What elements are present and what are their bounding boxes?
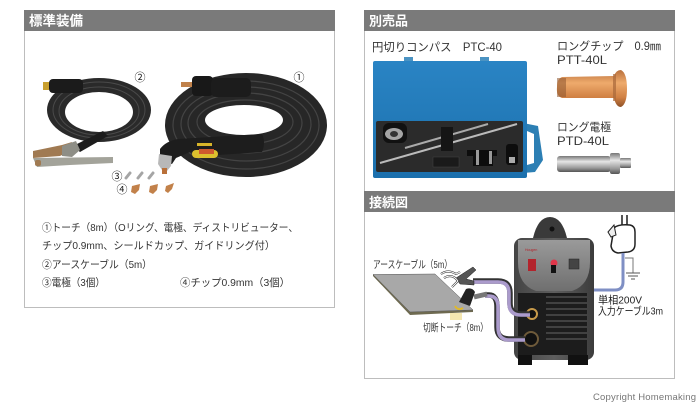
icon: plasma cutter machine: Hougen — [525, 248, 537, 252]
label: long electrode: PTD-40L — [557, 136, 610, 148]
icon: metal plate — [373, 274, 473, 315]
text: equipment list: ②アースケーブル（5m） — [42, 258, 152, 271]
text: equipment list — [42, 221, 298, 289]
icon: torch cable path — [485, 295, 525, 339]
label: input cable text — [598, 294, 663, 318]
panel: connection diagram — [364, 191, 675, 378]
label: input cable text: 入力ケーブル3m — [598, 304, 663, 318]
heading: connection diagram — [364, 191, 675, 212]
label: long tip — [557, 39, 661, 67]
heading: optional parts — [364, 10, 675, 31]
label: number 1: ① — [294, 71, 304, 84]
icon: electrodes — [112, 170, 153, 183]
label: long electrode — [557, 120, 611, 148]
icon: electrodes: ③ — [112, 170, 122, 183]
text: equipment list: ①トーチ（8m）（Oリング、電極、ディストリビューター、 — [42, 221, 298, 234]
panel: optional parts — [364, 10, 675, 192]
label: earth cable: アースケーブル（5m） — [373, 258, 452, 271]
text: equipment list: ③電極（3個） — [42, 276, 105, 289]
label: input cable text: 単相200V — [598, 294, 642, 306]
label: long electrode: ロング電極 — [557, 120, 611, 134]
heading: standard equipment — [24, 10, 335, 31]
icon: earth cable path — [473, 281, 530, 314]
text: equipment list: ④チップ0.9mm（3個） — [180, 276, 290, 289]
panel: standard equipment — [24, 10, 335, 308]
icon: power plug and ground — [608, 215, 640, 279]
label: long tip: PTT-40L — [557, 55, 608, 67]
label: circle compass: 円切りコンパス PTC-40 — [372, 41, 502, 54]
icon: plasma torch — [158, 134, 264, 174]
icon: tips — [116, 183, 174, 196]
icon: long tip — [557, 70, 627, 107]
icon: torch cable coil — [165, 73, 327, 177]
text: equipment list: チップ0.9mm、シールドカップ、ガイドリング付） — [42, 239, 275, 252]
icon: tips: ④ — [116, 183, 128, 196]
icon: torch cable inner — [485, 296, 525, 340]
icon: input cable — [594, 253, 623, 290]
icon: earth clamp — [33, 131, 113, 167]
icon: compass case — [373, 57, 543, 178]
icon: plasma cutter machine — [514, 217, 594, 365]
copyright: Copyright Homemaking — [593, 392, 696, 403]
icon: earth clamp in diagram — [441, 267, 476, 287]
heading: connection diagram: 接続図 — [369, 195, 408, 210]
heading: optional parts: 別売品 — [369, 14, 408, 28]
label: cutting torch: 切断トーチ（8m） — [423, 322, 488, 334]
icon: earth cable inner — [473, 282, 530, 315]
icon: earth cable coil — [43, 78, 151, 142]
icon: long electrode — [557, 153, 631, 174]
label: long tip: ロングチップ 0.9㎜ — [557, 39, 661, 53]
icon: torch in diagram — [450, 288, 487, 320]
heading: standard equipment: 標準装備 — [29, 12, 83, 28]
label: number 2: ② — [134, 71, 146, 84]
